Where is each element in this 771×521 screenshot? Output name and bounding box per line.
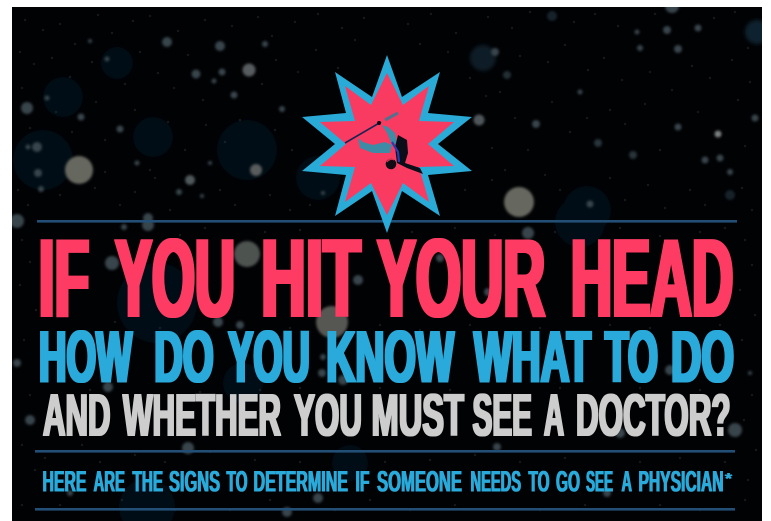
headline line 2: KNOW [326,317,454,398]
rule below subheading [35,508,735,511]
headline line 1 [39,216,733,340]
bright snow bokeh [65,156,534,217]
headline line 3: WHETHER [123,382,281,448]
icon: starburst with snowboarder [302,55,472,233]
subheading: THE [132,466,163,498]
headline line 2: DO [154,317,214,398]
headline line 1: IF [39,216,89,340]
subheading: TO [528,466,550,498]
subheading: IF [356,466,370,498]
headline line 3: A [544,382,564,448]
headline line 2 [39,317,734,398]
subheading: DETERMINE [254,466,348,498]
subheading: HERE [42,466,86,498]
subheading: NEEDS [470,466,521,498]
headline line 2: YOU [228,317,310,398]
subheading: A [622,466,632,498]
rule above headline [37,220,737,223]
rule below headline [35,450,735,453]
headline line 3: MUST [372,382,464,448]
subheading: * [725,471,733,488]
headline line 2: WHAT [474,317,591,398]
headline line 1: YOU [115,216,235,340]
headline line 3: AND [43,382,110,448]
snowboarder silhouette [345,113,423,174]
subheading [42,466,733,498]
headline line 3: SEE [472,382,532,448]
headline line 2: HOW [39,317,132,398]
subheading: GO [556,466,580,498]
starburst outer blue [302,55,472,233]
subheading: SOMEONE [377,466,462,498]
headline line 3 [43,382,730,448]
subheading: SIGNS [169,466,220,498]
subheading: SEE [586,466,613,498]
starburst inner red [320,73,454,215]
headline line 1: YOUR [377,216,545,340]
subheading: TO [226,466,248,498]
headline line 3: YOU [294,382,362,448]
subheading: ARE [94,466,125,498]
headline line 1: HIT [261,216,361,340]
headline line 2: TO [605,317,658,398]
